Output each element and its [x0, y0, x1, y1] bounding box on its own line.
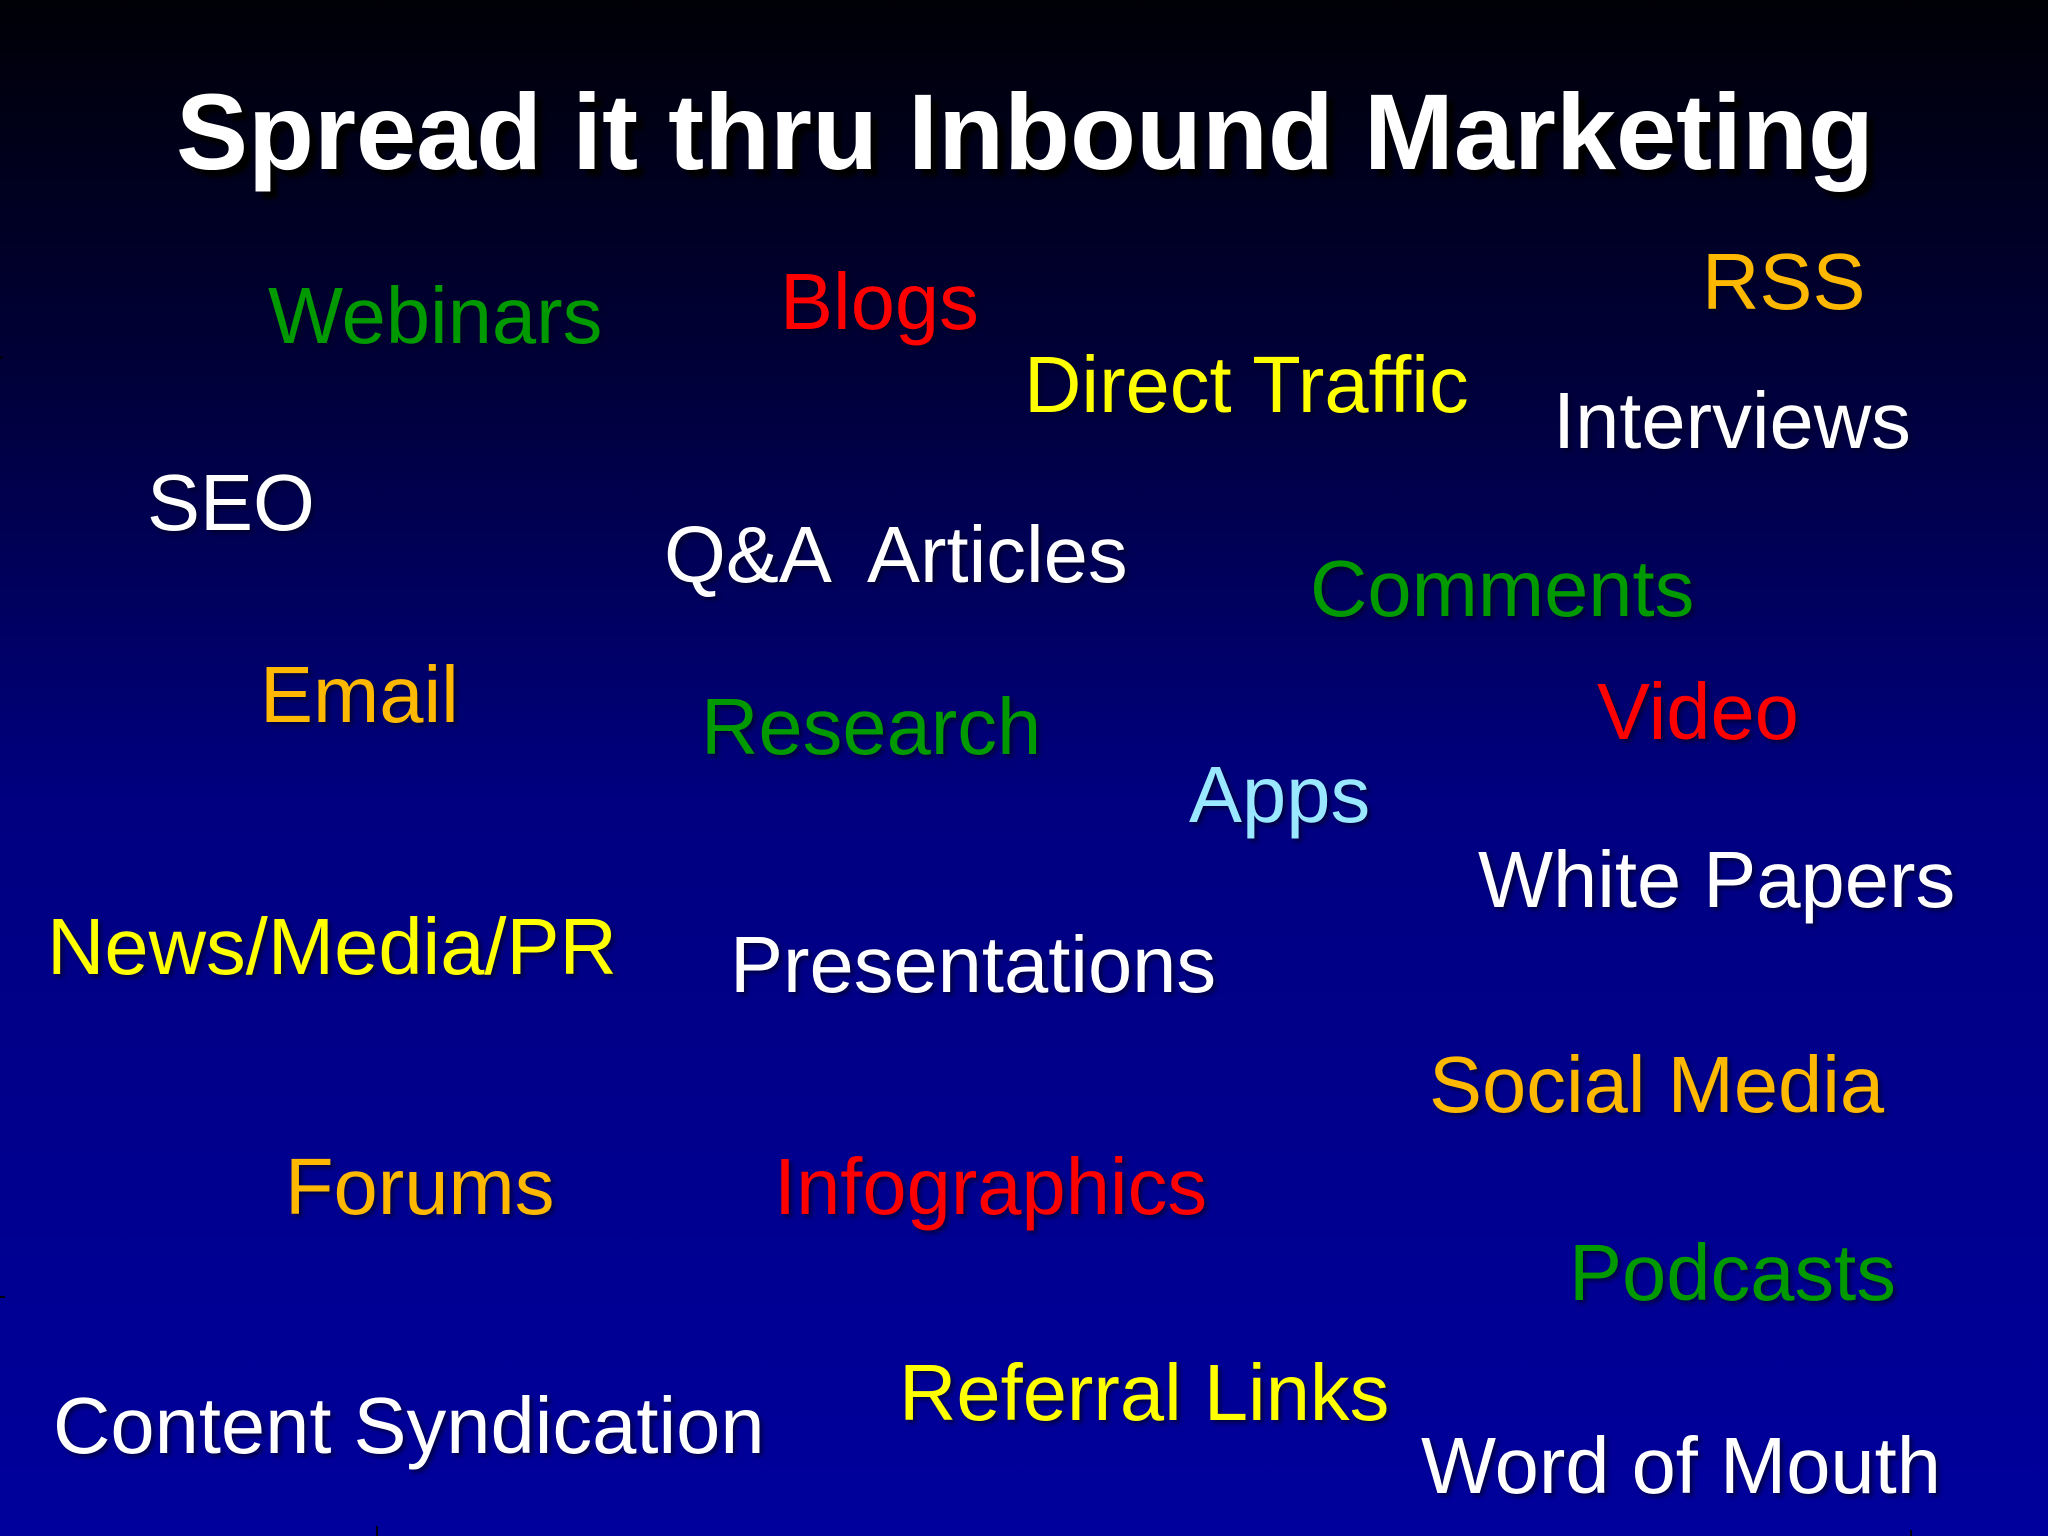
title: Spread it thru Inbound Marketing — [176, 71, 1874, 192]
term: Social Media: Social Media — [1429, 1040, 1884, 1129]
term: RSS: RSS — [1702, 237, 1865, 326]
term: Infographics: Infographics — [774, 1142, 1207, 1231]
term: Word of Mouth: Word of Mouth — [1421, 1421, 1941, 1510]
term: SEO: SEO — [147, 458, 315, 547]
term: Blogs: Blogs — [780, 257, 979, 346]
term: Webinars: Webinars — [268, 271, 602, 360]
term: Presentations: Presentations — [730, 920, 1216, 1009]
term: Comments: Comments — [1310, 544, 1694, 633]
term: Q&A: Q&A — [664, 510, 832, 599]
term: Referral Links: Referral Links — [899, 1348, 1389, 1437]
term: Email: Email — [260, 650, 459, 739]
term: Apps: Apps — [1189, 750, 1370, 839]
term: Research: Research — [701, 682, 1041, 771]
term: Podcasts: Podcasts — [1569, 1228, 1896, 1317]
term: Articles: Articles — [867, 510, 1128, 599]
term: Video: Video — [1597, 667, 1799, 756]
term: Direct Traffic: Direct Traffic — [1024, 340, 1469, 429]
term: Content Syndication: Content Syndication — [53, 1381, 765, 1470]
term: Forums: Forums — [285, 1142, 554, 1231]
term: News/Media/PR: News/Media/PR — [47, 902, 617, 991]
term: Interviews: Interviews — [1553, 376, 1911, 465]
term: White Papers: White Papers — [1478, 835, 1955, 924]
